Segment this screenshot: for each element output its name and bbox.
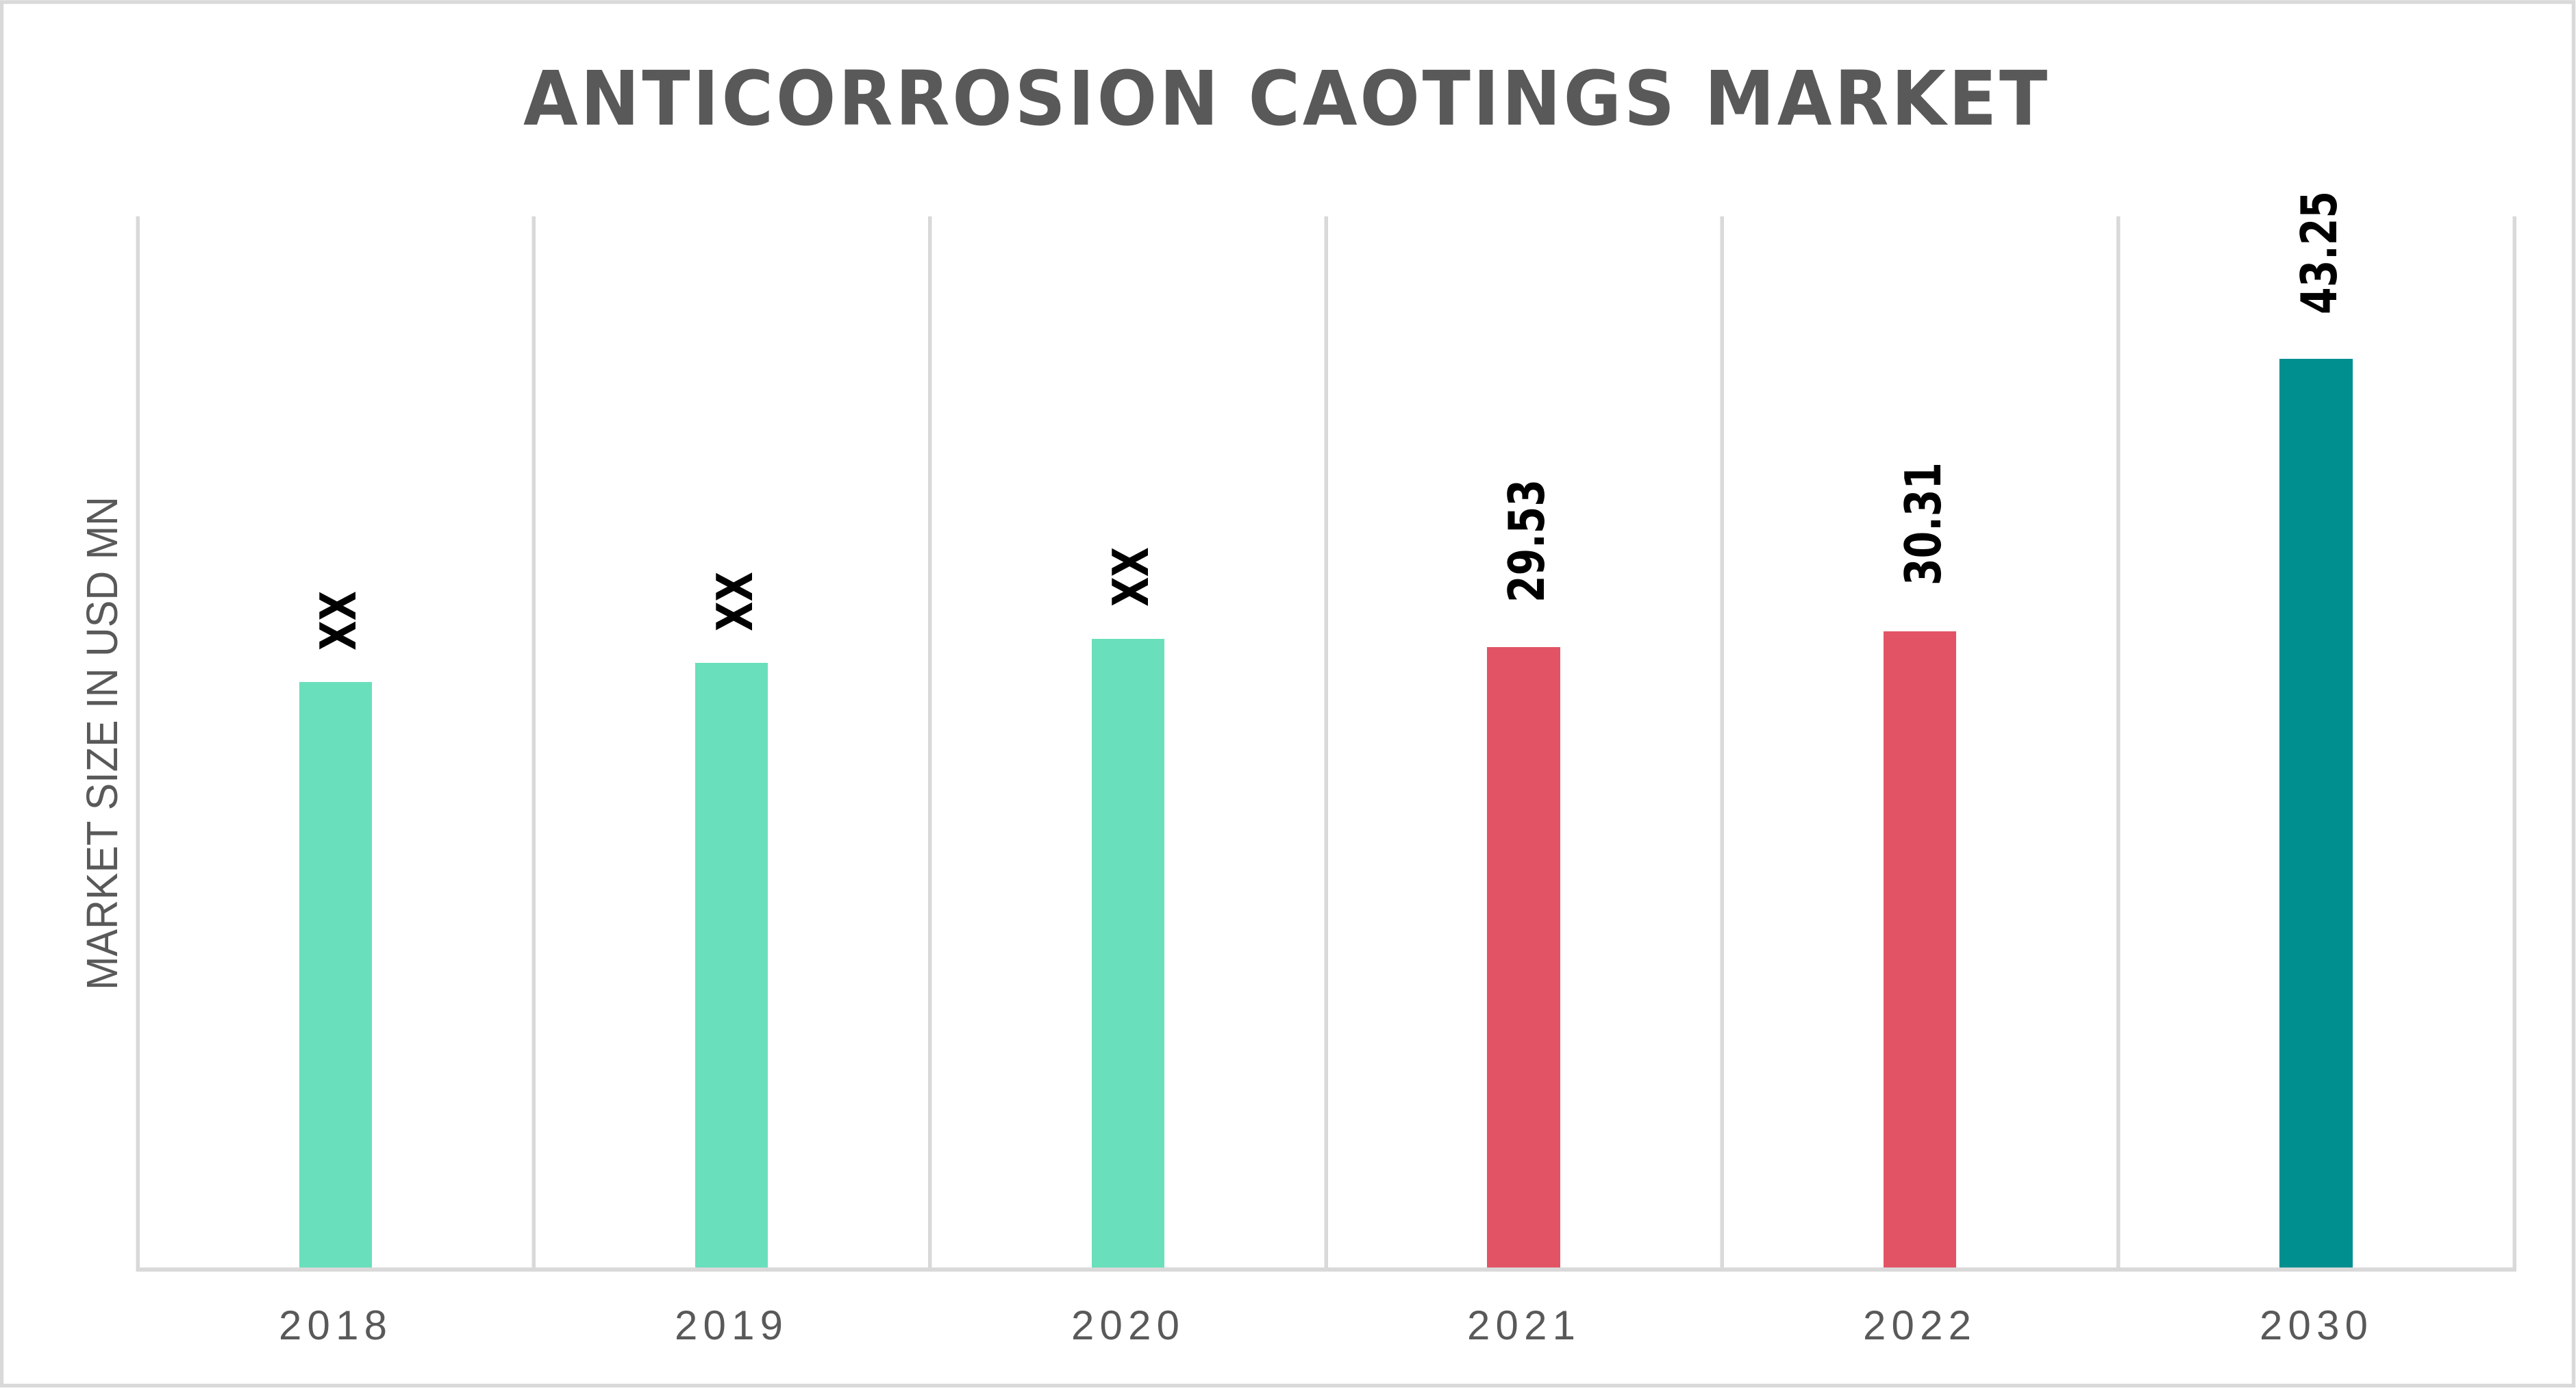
gridlines and x axis — [136, 216, 2516, 1272]
y-axis label: MARKET SIZE IN USD MN — [77, 496, 127, 990]
value labels — [310, 191, 2348, 651]
value: 2021: 29.53 — [1498, 479, 1555, 603]
year: 2022: 2022 — [1863, 1302, 1971, 1348]
bar: 2021 — [1487, 647, 1560, 1267]
value: 2019: XX — [706, 572, 764, 631]
bar chart — [299, 359, 2353, 1267]
value: 2020: XX — [1102, 547, 1160, 607]
year: 2021: 2021 — [1467, 1302, 1575, 1348]
year: 2018: 2018 — [279, 1302, 387, 1348]
value: 2018: XX — [310, 591, 367, 651]
year: 2019: 2019 — [675, 1302, 783, 1348]
value: 2030: 43.25 — [2290, 191, 2348, 314]
year: 2030: 2030 — [2260, 1302, 2368, 1348]
bar: 2020 — [1092, 639, 1164, 1267]
title: ANTICORROSION CAOTINGS MARKET — [523, 55, 2050, 142]
bar: 2022 — [1884, 631, 1956, 1267]
bar: 2018 — [299, 682, 372, 1267]
x-axis year labels — [279, 1302, 2368, 1348]
bar: 2019 — [695, 663, 768, 1267]
year: 2020: 2020 — [1071, 1302, 1179, 1348]
value: 2022: 30.31 — [1895, 462, 1952, 585]
bar: 2030 — [2279, 359, 2353, 1267]
